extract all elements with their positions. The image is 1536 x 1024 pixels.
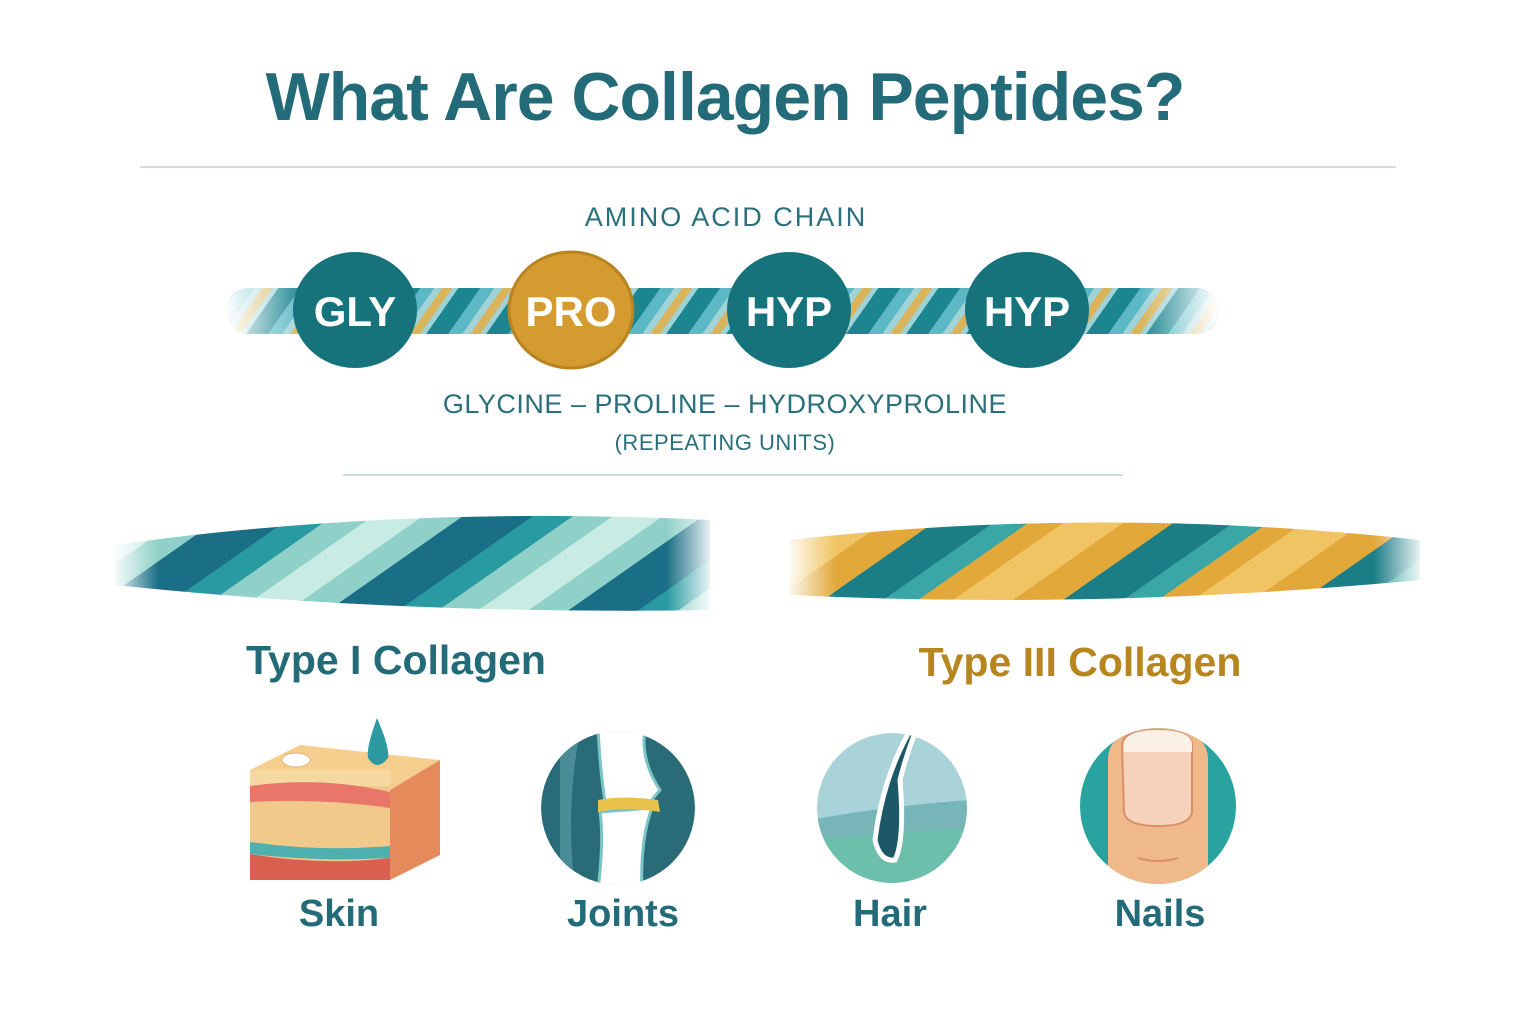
label: nails: Nails — [1115, 893, 1205, 935]
icon: hair — [817, 733, 967, 883]
title: What Are Collagen Peptides? — [266, 59, 1184, 135]
heading: type III collagen: Type III Collagen — [919, 639, 1241, 685]
icon: nails — [1080, 728, 1236, 884]
text: repeating units: (REPEATING UNITS) — [615, 430, 835, 455]
heading: type I collagen: Type I Collagen — [246, 637, 546, 683]
node PRO — [509, 252, 633, 368]
rope: type III — [785, 500, 1425, 615]
subheading: amino acid chain: AMINO ACID CHAIN — [585, 202, 867, 232]
node HYP 2 — [965, 252, 1089, 368]
label: skin: Skin — [299, 893, 379, 935]
text: glycine-proline-hydroxyproline: GLYCINE – PROLINE – HYDROXYPROLINE — [443, 389, 1007, 419]
node PRO: PRO — [525, 288, 617, 335]
icon: joints — [541, 728, 695, 890]
node HYP 1: HYP — [746, 288, 832, 335]
icon: skin — [250, 718, 440, 880]
node GLY — [293, 252, 417, 368]
node GLY: GLY — [314, 288, 396, 335]
label: joints: Joints — [567, 893, 679, 935]
amino acid chain graphic — [115, 250, 1420, 885]
node HYP 1 — [727, 252, 851, 368]
label: hair: Hair — [853, 893, 927, 935]
node HYP 2: HYP — [984, 288, 1070, 335]
rope: type I — [110, 500, 715, 620]
